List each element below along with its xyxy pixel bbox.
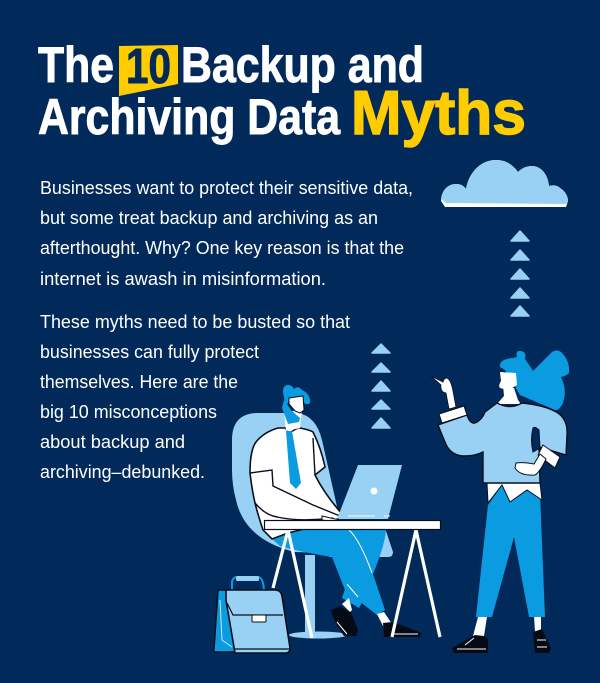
ankles [473,616,541,636]
shoes [331,598,421,637]
face [499,372,517,390]
title: Backup and [181,37,424,93]
neck [497,385,521,404]
arrows: right column [511,231,529,316]
raised hand [431,376,456,409]
intro paragraph: but some treat backup and archiving as an [40,208,378,228]
illustration: man at desk [214,385,440,653]
hand on hip [515,454,546,475]
badge: 10: 10 [126,40,171,94]
second paragraph [40,312,350,482]
shoes [452,629,551,653]
armhole [532,427,540,452]
tie [286,431,301,489]
intro paragraph: Businesses want to protect their sensitive data, [40,178,413,198]
intro paragraph [40,178,413,289]
title: The [38,37,114,93]
second paragraph: big 10 misconceptions [40,402,217,422]
title [38,37,526,148]
arrows: left column [372,344,390,428]
sleeve and arm lines [250,428,340,520]
second paragraph: themselves. Here are the [40,372,238,392]
neck and beard [284,410,302,431]
intro paragraph: afterthought. Why? One key reason is that the [40,238,404,258]
chair [232,413,393,638]
trousers [476,485,545,617]
icon: cloud [441,160,568,207]
sweater [438,403,567,483]
trousers [272,530,386,615]
intro paragraph: internet is awash in misinformation. [40,269,326,289]
hair [500,350,569,410]
desk top [264,520,440,530]
hair [283,385,310,408]
second paragraph: businesses can fully protect [40,342,259,362]
shirt tails [487,483,542,503]
shirt [250,428,343,539]
face [289,396,304,413]
title: Myths [351,79,526,148]
laptop [322,465,402,522]
second paragraph: about backup and [40,432,185,452]
cuffs [439,406,560,468]
briefcase [214,576,290,653]
illustration: woman [431,350,569,653]
second paragraph: These myths need to be busted so that [40,312,350,332]
title: Archiving Data [38,89,341,145]
second paragraph: archiving–debunked. [40,462,205,482]
desk legs [273,530,440,638]
